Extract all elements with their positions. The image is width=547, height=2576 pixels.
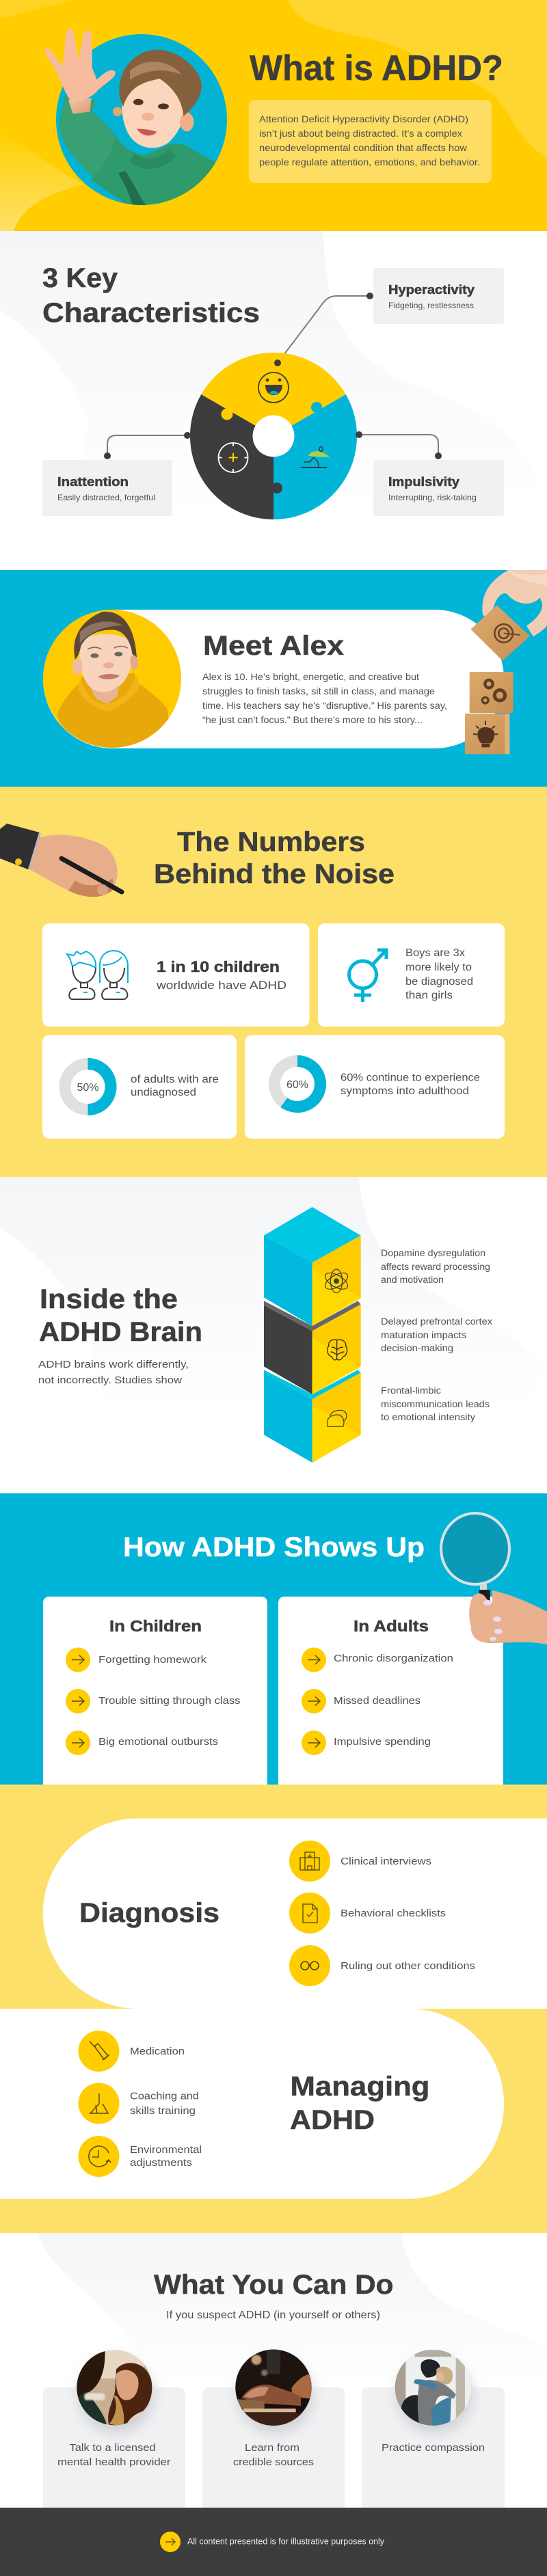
card: inattention: Inattention	[57, 475, 129, 489]
list item: ruling out: Ruling out other conditions	[341, 1960, 475, 1972]
list item: environmental	[78, 2136, 202, 2177]
list item	[66, 1647, 207, 1672]
list item	[302, 1647, 453, 1672]
panel: the numbers behind the noise	[0, 787, 547, 1177]
heading	[39, 1284, 202, 1347]
card: in adults: In Adults	[353, 1617, 429, 1635]
card: learn from credible sources: Learn from	[245, 2442, 299, 2454]
card: practice compassion	[362, 2349, 505, 2508]
list item: Big emotional outbursts	[98, 1736, 218, 1748]
card: inattention	[42, 460, 172, 516]
stat card: 1 in 10 children: 1 in 10 children	[157, 958, 280, 975]
connector dots	[104, 293, 442, 459]
list item: behavioral checklists	[289, 1893, 446, 1934]
panel: diagnosis: Diagnosis	[79, 1898, 219, 1928]
text block: dopamine: and motivation	[381, 1275, 444, 1285]
text block: dopamine	[381, 1248, 490, 1285]
illustration: hand with magnifying glass	[441, 1513, 547, 1644]
photo: two people hugging	[395, 2349, 472, 2426]
icon: smile	[258, 372, 289, 403]
heading	[154, 827, 395, 889]
card: learn from credible sources: credible sources	[233, 2456, 314, 2468]
panel: 3 key characteristics	[0, 231, 547, 570]
list item: medication	[78, 2031, 185, 2072]
card: impulsivity	[373, 460, 504, 516]
stat card: boys vs girls: Boys are 3x	[405, 947, 465, 959]
panel: managing ADHD: Managing	[290, 2072, 429, 2102]
list item: coaching: Coaching and	[130, 2090, 199, 2102]
icon: brain	[328, 1340, 347, 1360]
heading: ADHD Brain	[39, 1317, 202, 1347]
icon: runner	[301, 447, 328, 467]
heading: Behind the Noise	[154, 859, 395, 889]
image: Alex portrait	[43, 610, 181, 750]
stat card: boys vs girls: more likely to	[405, 962, 472, 973]
subheading: If you suspect ADHD (in yourself or others)	[166, 2309, 380, 2321]
stat card: boys vs girls	[318, 923, 505, 1027]
card: practice compassion: Practice compassion	[382, 2442, 485, 2454]
card: hyperactivity	[373, 268, 504, 324]
stat card: boys vs girls: than girls	[405, 990, 453, 1001]
list item: clinical interviews: Clinical interviews	[341, 1856, 431, 1867]
icon: two children	[67, 951, 128, 999]
text block: prefrontal cortex	[381, 1316, 492, 1353]
card: impulsivity: Impulsivity	[388, 475, 459, 489]
text block: frontal-limbic: Frontal-limbic	[381, 1385, 441, 1396]
text block: intro	[38, 1359, 189, 1386]
list item: Trouble sitting through class	[98, 1695, 241, 1707]
heading: Inside the	[40, 1284, 178, 1314]
illustration: hand stacking blocks	[465, 570, 547, 754]
footer note: All content presented is for illustrative purposes only	[187, 2537, 385, 2547]
list item: ruling out	[289, 1945, 475, 1986]
list item: Impulsive spending	[334, 1736, 431, 1748]
list item: behavioral checklists: Behavioral checklists	[341, 1908, 446, 1919]
heading: Characteristics	[42, 298, 260, 328]
card: talk to a provider: mental health provider	[57, 2456, 171, 2468]
list item: environmental: adjustments	[130, 2157, 192, 2169]
panel: inside the ADHD brain	[0, 1177, 547, 1493]
text block: Alex story: time. His teachers say he's “disruptive.” His parents say,	[202, 700, 447, 711]
text block: definition: people regulate attention, emotions, and behavior.	[259, 157, 480, 167]
list item: Missed deadlines	[334, 1695, 421, 1707]
panel: what you can do	[38, 2233, 505, 2508]
text block: dopamine: affects reward processing	[381, 1262, 490, 1272]
heading: What You Can Do	[154, 2270, 394, 2300]
list item: clinical interviews	[289, 1841, 431, 1882]
icon: arrow	[160, 2532, 181, 2552]
donut chart: 60%: 60%	[286, 1079, 308, 1091]
heading: The Numbers	[177, 827, 365, 857]
icon: target	[219, 443, 248, 472]
text block: prefrontal cortex: Delayed prefrontal cortex	[381, 1316, 492, 1327]
card: learn from credible sources	[202, 2349, 345, 2508]
list item: medication: Medication	[130, 2046, 185, 2057]
text block: definition: isn’t just about being distracted. It’s a complex	[259, 128, 462, 139]
heading: 3 Key	[42, 263, 118, 293]
stat card: 60 percent: symptoms into adulthood	[341, 1085, 469, 1097]
stat card: 1 in 10 children	[42, 923, 309, 1027]
panel: managing ADHD: ADHD	[290, 2105, 375, 2135]
list item	[66, 1731, 218, 1755]
heading: Meet Alex	[203, 631, 344, 661]
text block: frontal-limbic	[381, 1385, 490, 1422]
panel: meet Alex	[0, 570, 547, 787]
heading	[42, 263, 260, 328]
card: talk to a provider: Talk to a licensed	[70, 2442, 156, 2454]
photo: hands on laptop	[235, 2349, 312, 2426]
card: hyperactivity: Fidgeting, restlessness	[388, 301, 474, 310]
title: What is ADHD?	[250, 49, 503, 88]
stat card: 50 percent: undiagnosed	[131, 1087, 196, 1098]
panel: how ADHD shows up	[0, 1493, 547, 1785]
photo: smiling woman	[75, 2349, 155, 2426]
card: inattention: Easily distracted, forgetful	[57, 493, 155, 502]
connector lines	[107, 296, 438, 456]
text block: intro: ADHD brains work differently,	[38, 1359, 189, 1370]
text block: definition: neurodevelopmental condition that affects how	[259, 142, 468, 153]
list item: Chronic disorganization	[334, 1653, 453, 1664]
icon: gender symbol	[349, 950, 386, 1002]
stat card: 50 percent	[42, 1035, 237, 1139]
stat card: 50 percent: of adults with are	[131, 1074, 219, 1085]
card: in children	[43, 1597, 267, 1785]
text block: Alex story: “he just can’t focus.” But there’s more to his story...	[202, 714, 423, 725]
text block: definition: Attention Deficit Hyperactivity Disorder (ADHD)	[259, 113, 468, 124]
text block: Alex story: Alex is 10. He’s bright, energetic, and creative but	[202, 671, 419, 682]
icon: speech bubbles	[328, 1410, 347, 1426]
puzzle wheel	[190, 353, 357, 519]
list item	[302, 1731, 431, 1755]
footer	[0, 2508, 547, 2576]
donut chart: 50%: 50%	[77, 1082, 99, 1094]
text block: Alex story	[202, 671, 447, 725]
card: in adults	[278, 1597, 503, 1785]
list item	[302, 1689, 421, 1713]
text block: Alex story: struggles to finish tasks, sit still in class, and manage	[202, 686, 435, 696]
text block: definition	[249, 100, 492, 183]
panel: diagnosis	[43, 1818, 547, 2009]
text block: frontal-limbic: miscommunication leads	[381, 1399, 490, 1409]
panel: diagnosis and managing	[0, 1785, 547, 2233]
text block: intro: not incorrectly. Studies show	[38, 1374, 182, 1386]
stat card: 60 percent: 60% continue to experience	[341, 1072, 480, 1084]
list item: environmental: Environmental	[130, 2144, 202, 2156]
stat card: 1 in 10 children: worldwide have ADHD	[156, 979, 286, 992]
card: impulsivity: Interrupting, risk-taking	[388, 493, 477, 502]
text block: prefrontal cortex: maturation impacts	[381, 1330, 466, 1340]
diagram: stacked cubes	[264, 1207, 361, 1463]
text block: dopamine: Dopamine dysregulation	[381, 1248, 485, 1258]
text block: frontal-limbic: to emotional intensity	[381, 1412, 475, 1422]
list item	[66, 1689, 241, 1713]
icon: atom	[323, 1269, 350, 1293]
card: in children: In Children	[109, 1617, 202, 1635]
donut chart: 50%	[65, 1063, 111, 1110]
panel: managing ADHD	[0, 2009, 504, 2199]
list item: Forgetting homework	[98, 1654, 207, 1666]
list item: coaching: skills training	[130, 2105, 196, 2117]
image: waving boy on cyan circle	[45, 29, 227, 205]
text block: prefrontal cortex: decision-making	[381, 1343, 453, 1353]
donut chart: 60%	[275, 1061, 320, 1107]
list item: coaching	[78, 2083, 199, 2124]
stat card: 60 percent	[245, 1035, 505, 1139]
heading: How ADHD Shows Up	[123, 1532, 425, 1562]
stat card: boys vs girls: be diagnosed	[405, 976, 473, 988]
panel: what is ADHD hero	[0, 0, 547, 231]
illustration: hand with pen	[0, 824, 122, 897]
card: hyperactivity: Hyperactivity	[388, 283, 475, 297]
card: talk to a provider	[43, 2349, 185, 2508]
